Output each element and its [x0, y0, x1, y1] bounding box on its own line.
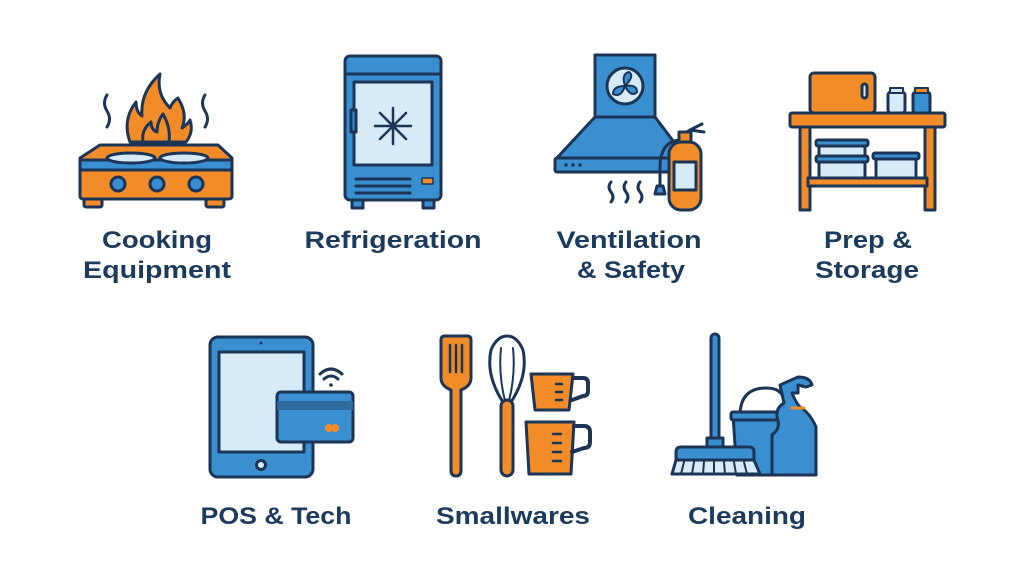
- icon: stove with flame: [80, 74, 232, 207]
- label: Ventilation & Safety: [556, 227, 702, 284]
- label: Prep & Storage: Prep &: [824, 227, 912, 254]
- icon: fridge: [345, 56, 441, 208]
- label: Refrigeration: Refrigeration: [304, 227, 482, 254]
- label: Cooking Equipment: Cooking: [102, 227, 212, 254]
- panel: POS & Tech: [200, 337, 353, 530]
- panel: ventilation & safety: [555, 55, 704, 284]
- panel: cooking equipment: [80, 74, 232, 284]
- label: Smallwares: Smallwares: [436, 503, 590, 530]
- icon: spatula whisk cups: [441, 336, 590, 476]
- label: Cleaning: Cleaning: [688, 503, 806, 530]
- label: Prep & Storage: Storage: [815, 257, 919, 284]
- icon: tablet and card: [210, 337, 353, 477]
- label: POS & Tech: POS & Tech: [200, 503, 352, 530]
- label: Ventilation & Safety: & Safety: [577, 257, 686, 284]
- label: Cooking Equipment: [83, 227, 231, 284]
- panel: cleaning: [672, 334, 816, 530]
- icon: prep table: [790, 73, 945, 210]
- label: Cooking Equipment: Equipment: [83, 257, 231, 284]
- label: Prep & Storage: [815, 227, 919, 284]
- icon: mop bucket spray: [672, 334, 816, 475]
- panel: refrigeration: [304, 56, 482, 254]
- panel: prep & storage: [790, 73, 945, 284]
- panel: smallwares: [436, 336, 590, 530]
- label: Ventilation & Safety: Ventilation: [556, 227, 702, 254]
- icon: hood and extinguisher: [555, 55, 704, 210]
